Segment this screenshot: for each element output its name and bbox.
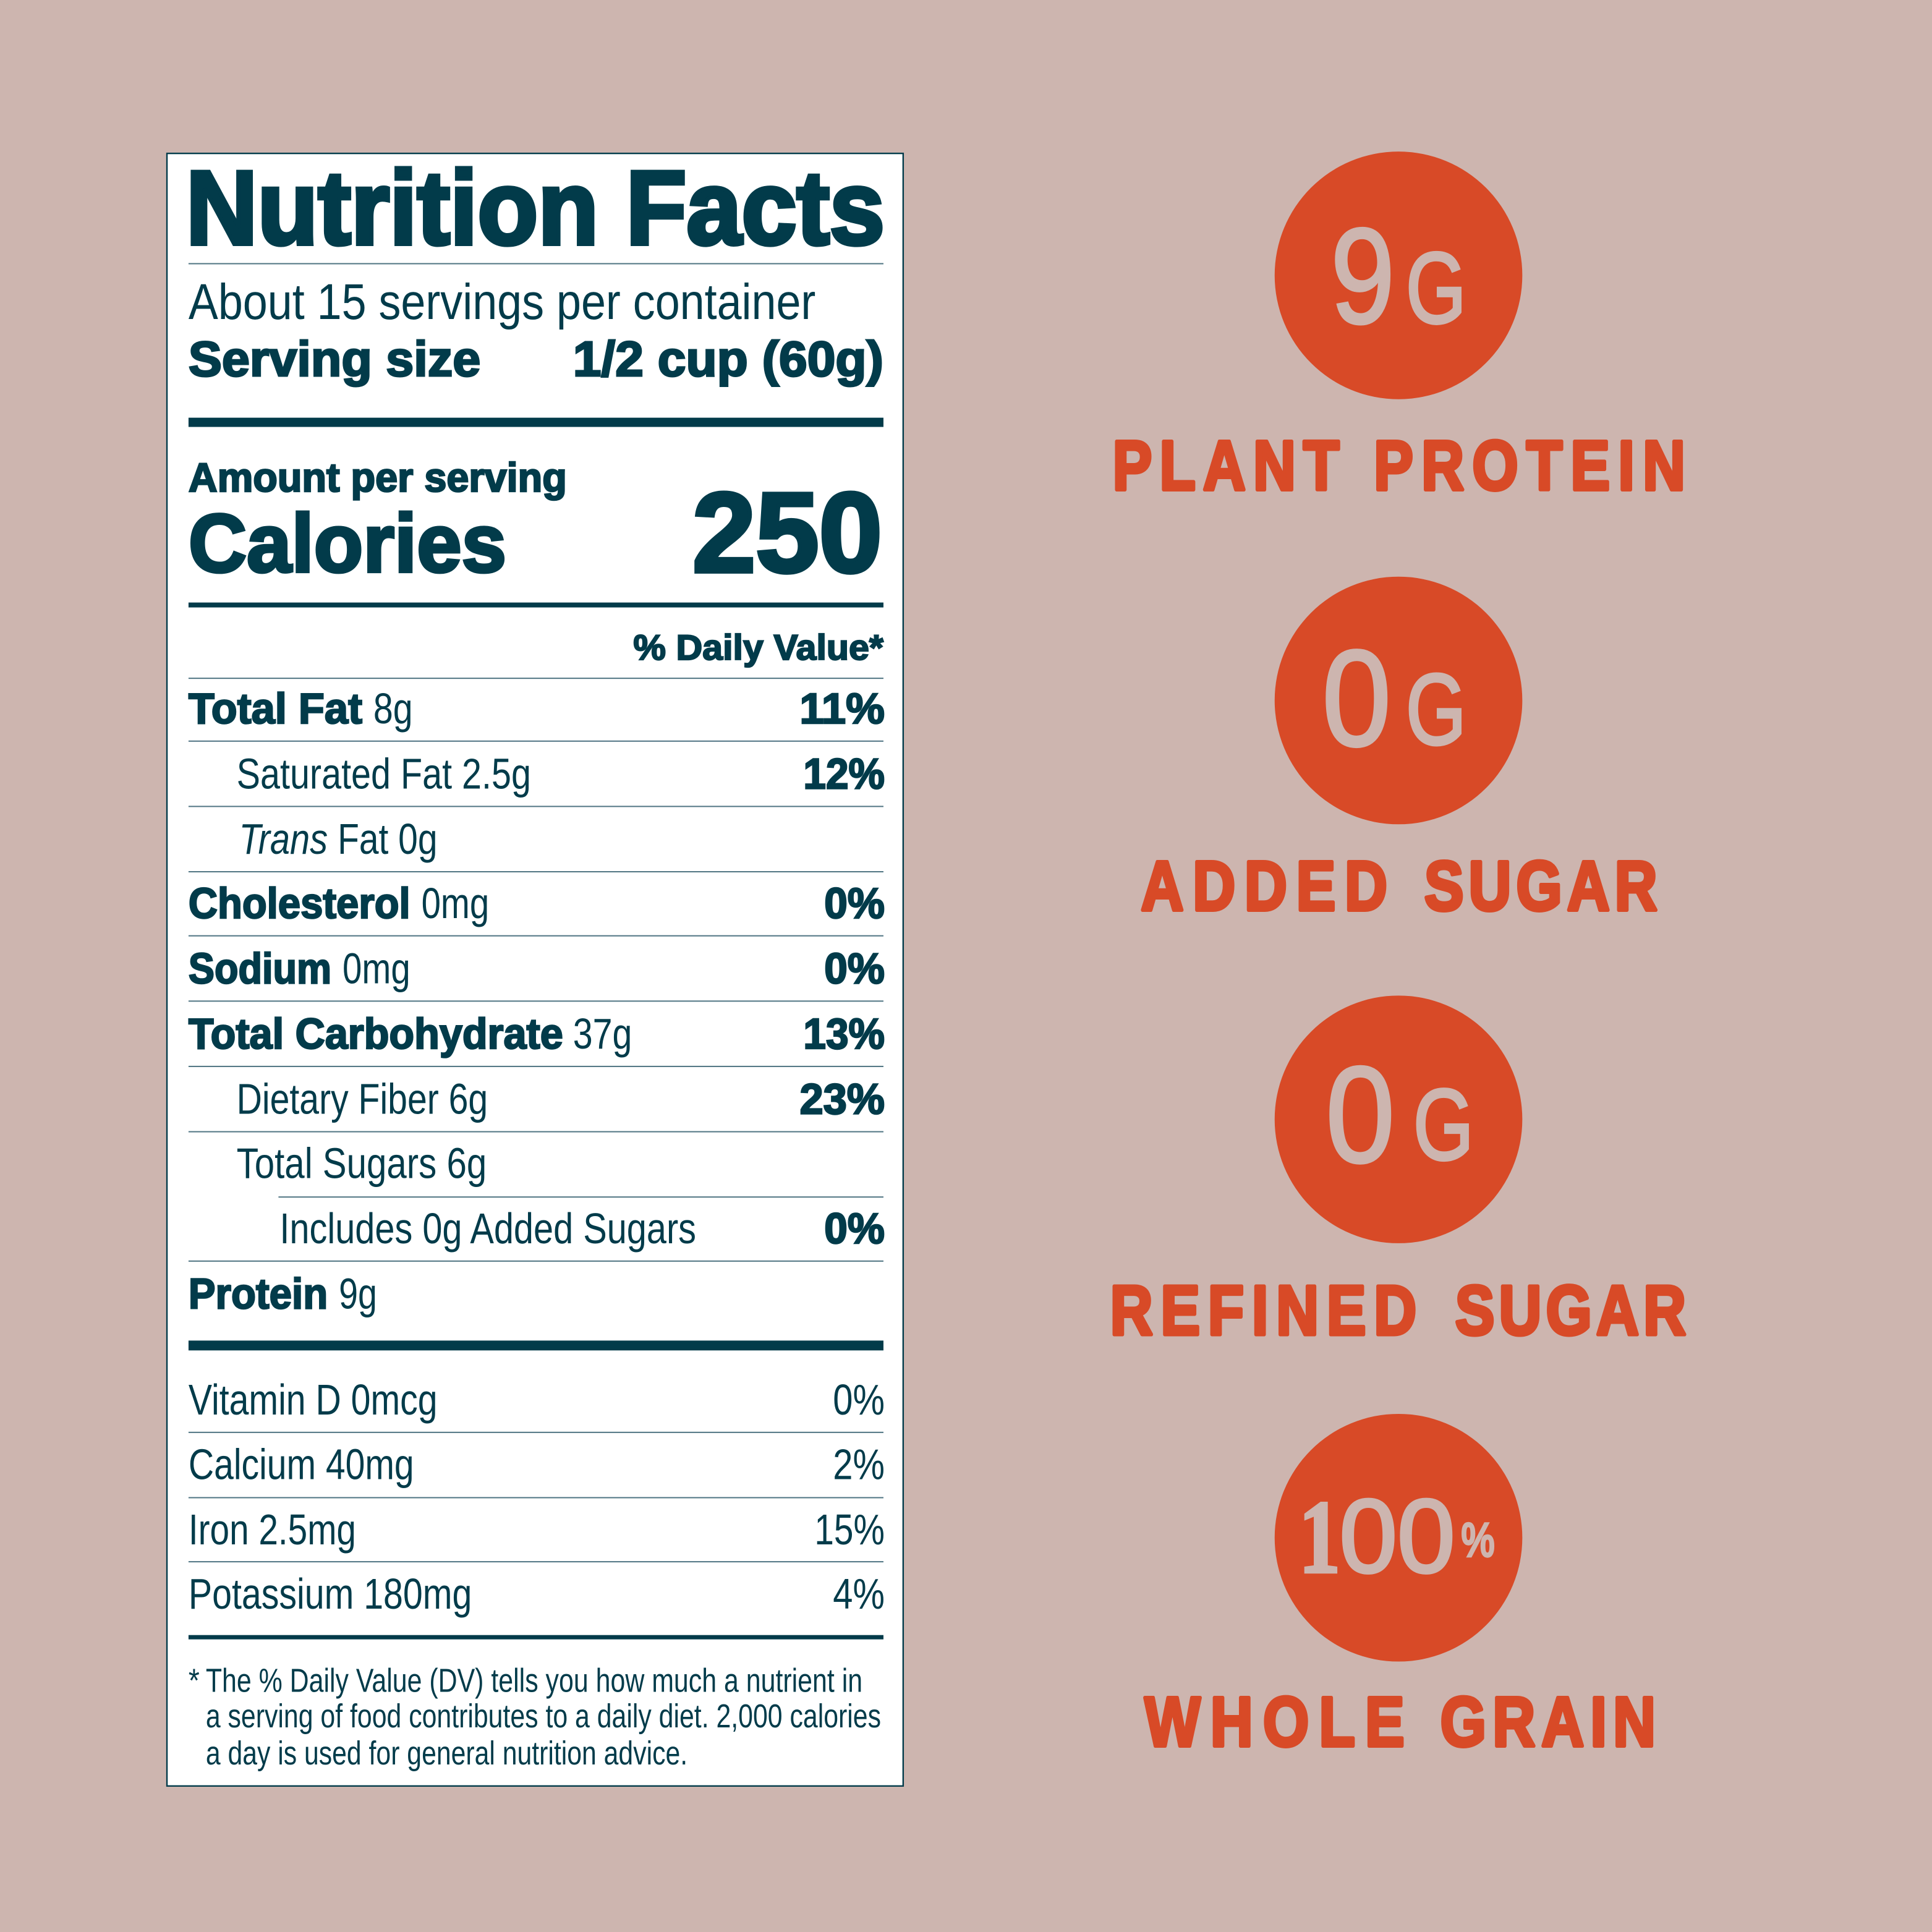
label: whole grain: WHOLE	[1144, 1683, 1405, 1761]
panel: nutrition facts label	[167, 150, 903, 1786]
row: vitamin d: Vitamin D 0mcg	[189, 1376, 438, 1424]
row: iron: 15%	[814, 1505, 885, 1554]
row: trans fat: Trans	[239, 815, 328, 863]
row: dietary fiber	[237, 1075, 885, 1123]
badge: plant protein	[1113, 151, 1685, 505]
row: calcium: 2%	[833, 1440, 885, 1489]
row: cholesterol	[189, 879, 885, 927]
row: added sugars: 0%	[824, 1204, 885, 1253]
badge: whole grain	[1144, 1414, 1656, 1761]
row: cholesterol: 0%	[824, 879, 885, 927]
row: vitamin d	[189, 1376, 885, 1424]
serving size: 1/2 cup (60g)	[573, 331, 883, 386]
row: sodium	[189, 944, 885, 992]
label: plant protein: PLANT	[1113, 427, 1339, 505]
footnote: a day is used for general nutrition advice.	[206, 1735, 687, 1772]
footnote: a serving of food contributes to a daily diet. 2,000 calories	[206, 1698, 881, 1735]
label: refined sugar: REFINED	[1110, 1272, 1416, 1350]
row: vitamin d: 0%	[833, 1376, 885, 1424]
calories value: 250	[692, 469, 882, 596]
servings per container: About 15 servings per container	[189, 274, 815, 330]
footnote: *	[189, 1662, 200, 1699]
row: cholesterol: 0mg	[422, 879, 489, 927]
footnote	[189, 1662, 881, 1772]
row: protein: 9g	[339, 1270, 377, 1318]
circle: 0g added: G	[1406, 653, 1466, 766]
circle: 0g added	[1275, 577, 1522, 824]
circle: 0g refined	[1275, 995, 1522, 1243]
row: potassium: 4%	[833, 1570, 885, 1618]
serving size	[189, 331, 883, 386]
row: sodium: 0mg	[343, 944, 411, 992]
calories heading: Calories	[189, 498, 506, 590]
row: total fat	[189, 684, 885, 733]
row: iron: Iron 2.5mg	[189, 1505, 356, 1554]
row: potassium: Potassium 180mg	[189, 1570, 472, 1618]
circle: 0g added: 0	[1322, 622, 1391, 775]
label: whole grain	[1144, 1683, 1656, 1761]
row: sodium: Sodium	[189, 944, 331, 992]
circle: 9g: G	[1406, 231, 1466, 344]
row: trans fat	[239, 815, 438, 863]
label: whole grain: GRAIN	[1440, 1683, 1656, 1761]
label: added sugar: ADDED	[1141, 847, 1387, 926]
row: total carbohydrate	[189, 1010, 885, 1058]
row: total fat: 8g	[373, 684, 413, 733]
row: total carbohydrate: 13%	[803, 1010, 885, 1058]
circle: 9g: 9	[1330, 201, 1395, 352]
row: dietary fiber: Dietary Fiber 6g	[237, 1075, 488, 1123]
footnote: The % Daily Value (DV) tells you how much a nutrient in	[206, 1662, 862, 1699]
row: protein: Protein	[189, 1270, 328, 1318]
circle: 100%: 1	[1299, 1479, 1340, 1595]
row: sodium: 0%	[824, 944, 885, 992]
row: saturated fat	[237, 750, 885, 798]
row: added sugars: Includes 0g Added Sugars	[279, 1204, 696, 1253]
label: plant protein	[1113, 427, 1685, 505]
row: iron	[189, 1505, 885, 1554]
row: calcium: Calcium 40mg	[189, 1440, 414, 1489]
circle: 9g	[1275, 151, 1522, 399]
row: dietary fiber: 23%	[799, 1075, 885, 1123]
daily value heading: % Daily Value*	[633, 628, 883, 668]
row: total sugars: Total Sugars 6g	[237, 1139, 487, 1187]
row: calcium	[189, 1440, 885, 1489]
circle: 100%: %	[1462, 1514, 1494, 1567]
label: refined sugar	[1110, 1272, 1686, 1350]
row: potassium	[189, 1570, 885, 1618]
serving size: Serving size	[189, 331, 480, 386]
circle: 0g refined: G	[1413, 1068, 1474, 1181]
label: refined sugar: SUGAR	[1455, 1272, 1686, 1350]
circle: 100%: 00	[1339, 1478, 1455, 1594]
row: saturated fat: 12%	[803, 750, 885, 798]
row: saturated fat: Saturated Fat 2.5g	[237, 750, 531, 798]
circle: 0g refined: 0	[1326, 1038, 1395, 1191]
badge: refined sugar	[1110, 995, 1686, 1350]
label: plant protein: PROTEIN	[1374, 427, 1685, 505]
row: trans fat: Fat 0g	[338, 815, 438, 863]
circle: 100%	[1275, 1414, 1522, 1662]
amount per serving: Amount per serving	[189, 454, 567, 500]
row: total fat: 11%	[799, 684, 885, 733]
badge: added sugar	[1141, 577, 1658, 926]
label: added sugar: SUGAR	[1424, 847, 1658, 926]
row: total carbohydrate: Total Carbohydrate	[189, 1010, 563, 1058]
label: added sugar	[1141, 847, 1658, 926]
row: total carbohydrate: 37g	[573, 1010, 632, 1058]
row: cholesterol: Cholesterol	[189, 879, 411, 927]
title: Nutrition Facts	[186, 150, 885, 266]
row: total fat: Total Fat	[189, 684, 362, 733]
